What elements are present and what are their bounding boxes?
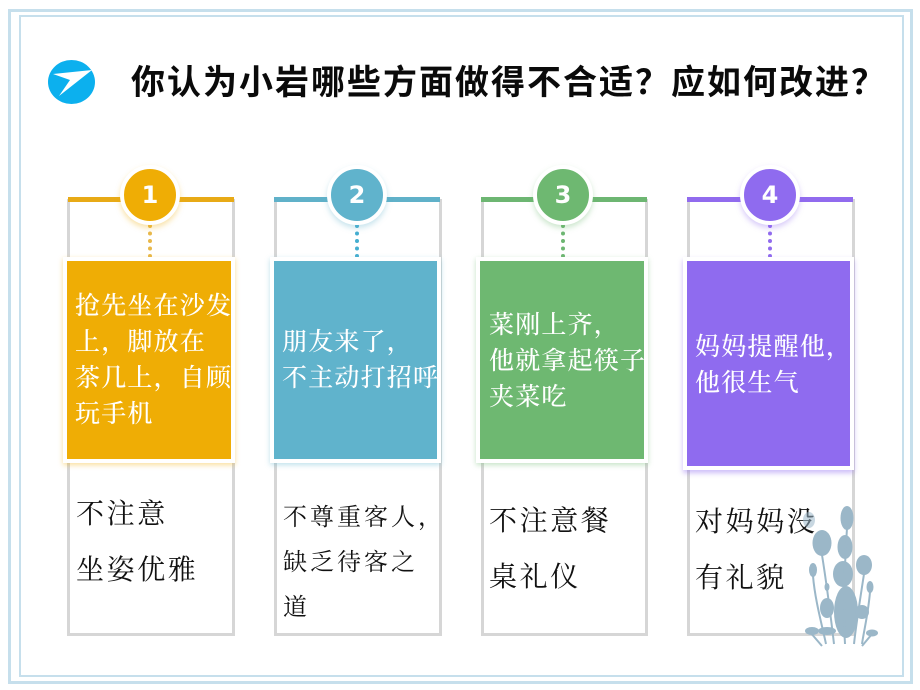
card 1 top bar <box>68 197 234 202</box>
card 3 <box>473 169 651 636</box>
card 3 top bar <box>481 197 647 202</box>
card 4 coloured panel <box>683 257 854 470</box>
card 4 number badge: 4 <box>762 181 778 209</box>
card 2 answer <box>283 504 445 621</box>
card 3 panel text: 夹菜吃 <box>489 384 568 411</box>
card 4 answer <box>695 507 817 594</box>
card 1 answer <box>76 499 198 586</box>
card 4 panel text: 妈妈提醒他， <box>695 334 852 361</box>
card 1 coloured panel <box>63 257 235 463</box>
card 3 panel text: 菜刚上齐， <box>489 312 620 339</box>
card 3 number badge <box>533 165 593 225</box>
card 4 answer: 有礼貌 <box>695 563 787 594</box>
card 1 connector <box>148 224 152 258</box>
card 1 frame <box>67 199 235 636</box>
card 1 number badge <box>120 165 180 225</box>
card 2 panel text: 朋友来了， <box>282 329 413 356</box>
card 1 number badge: 1 <box>142 181 158 209</box>
card 2 panel text: 不主动打招呼 <box>282 365 439 392</box>
card 4 top bar <box>687 197 853 202</box>
card 4 panel text: 他很生气 <box>695 370 800 397</box>
card 1 panel text <box>75 292 232 428</box>
card 3 answer: 不注意餐 <box>489 506 611 537</box>
card 1 panel text: 上，脚放在 <box>75 329 206 356</box>
card 2 number badge <box>327 165 387 225</box>
card 3 frame <box>481 199 648 636</box>
card 2 number badge: 2 <box>349 181 365 209</box>
card 2 panel text <box>282 328 439 392</box>
card 1 panel text: 抢先坐在沙发 <box>75 293 232 320</box>
card 1 panel text: 玩手机 <box>75 401 154 428</box>
card 3 connector <box>561 224 565 258</box>
card 2 coloured panel <box>270 257 441 463</box>
card 3 number badge: 3 <box>555 181 571 209</box>
card 3 answer <box>489 506 611 593</box>
card 3 answer: 桌礼仪 <box>489 562 581 593</box>
card 4 number badge <box>740 165 800 225</box>
card 4 connector <box>768 224 772 258</box>
card 1 panel text: 茶几上，自顾 <box>75 365 232 392</box>
card 4 frame <box>687 199 855 636</box>
card 4 panel text <box>695 334 852 397</box>
card 2 top bar <box>274 197 440 202</box>
card 3 panel text <box>489 312 646 411</box>
card 2 answer: 不尊重客人， <box>283 505 445 531</box>
card 2 connector <box>355 224 359 258</box>
card 1 answer: 不注意 <box>76 499 168 530</box>
card 1 <box>60 164 238 636</box>
decoration: flower silhouette <box>803 506 878 646</box>
icon: paper plane badge <box>48 60 95 104</box>
card 3 panel text: 他就拿起筷子 <box>489 348 646 375</box>
card 2 frame <box>274 199 442 636</box>
card 2 answer: 道 <box>283 595 310 621</box>
card 2 answer: 缺乏待客之 <box>283 550 418 576</box>
title: 你认为小岩哪些方面做得不合适？应如何改进？ <box>131 64 887 102</box>
card 3 coloured panel <box>476 257 648 463</box>
card 1 answer: 坐姿优雅 <box>76 555 198 586</box>
card 4 answer: 对妈妈没 <box>695 507 817 538</box>
card 2 <box>267 169 445 636</box>
card 4 <box>680 169 857 636</box>
